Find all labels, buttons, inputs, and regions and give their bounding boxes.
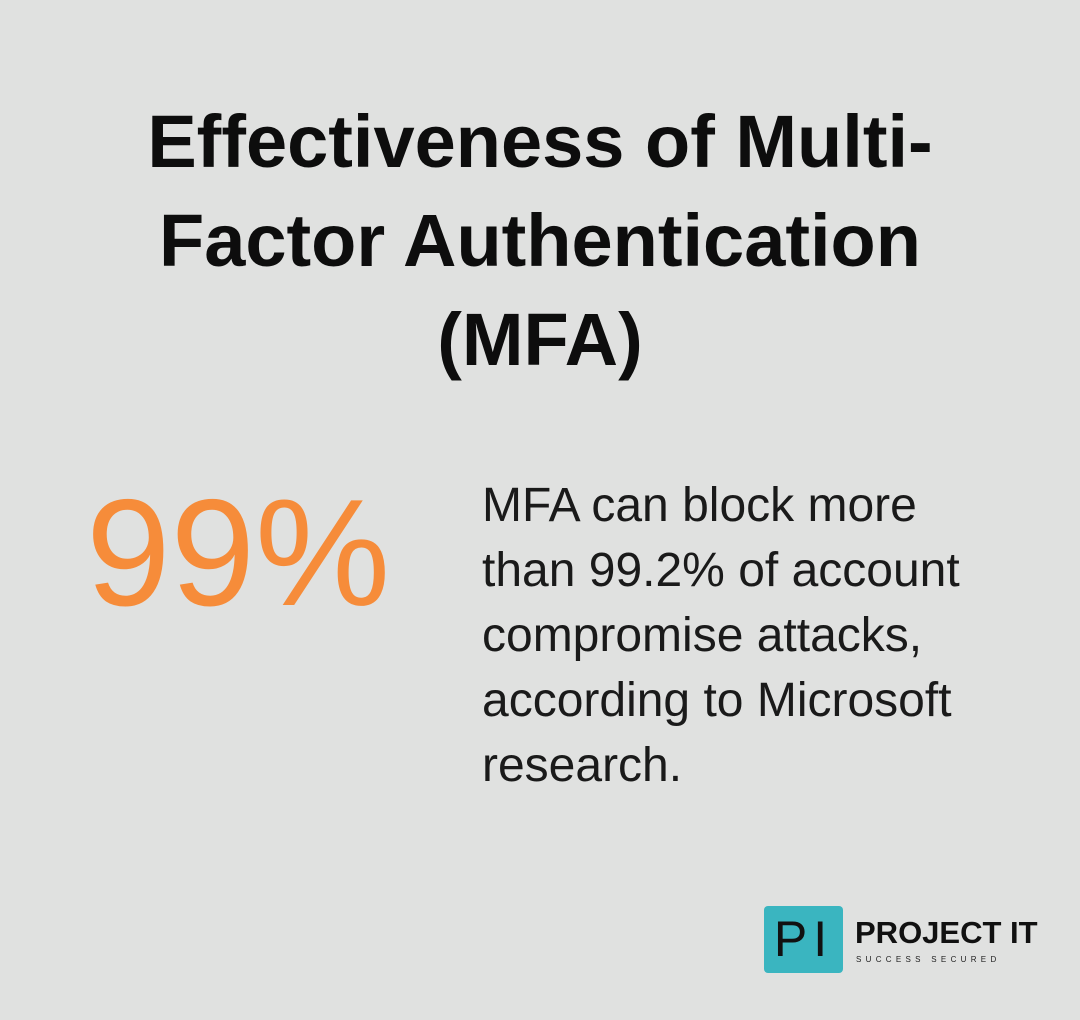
logo tagline: SUCCESS SECURED (856, 955, 1001, 964)
title: Effectiveness of Multi- (147, 100, 933, 183)
title: (MFA) (437, 298, 643, 381)
description text: compromise attacks, (482, 609, 922, 662)
description text: according to Microsoft (482, 674, 952, 727)
title: Factor Authentication (159, 199, 921, 282)
description text: than 99.2% of account (482, 544, 960, 597)
logo icon: PI box: PI (774, 911, 833, 967)
description text: MFA can block more (482, 479, 917, 532)
description text: research. (482, 739, 682, 792)
description text (482, 479, 960, 792)
title (147, 100, 933, 381)
big stat: 99%: 99% (86, 468, 390, 638)
logo name: PROJECT IT (855, 915, 1038, 950)
logo: Project IT (764, 906, 1038, 973)
logo icon: PI box (764, 906, 843, 973)
